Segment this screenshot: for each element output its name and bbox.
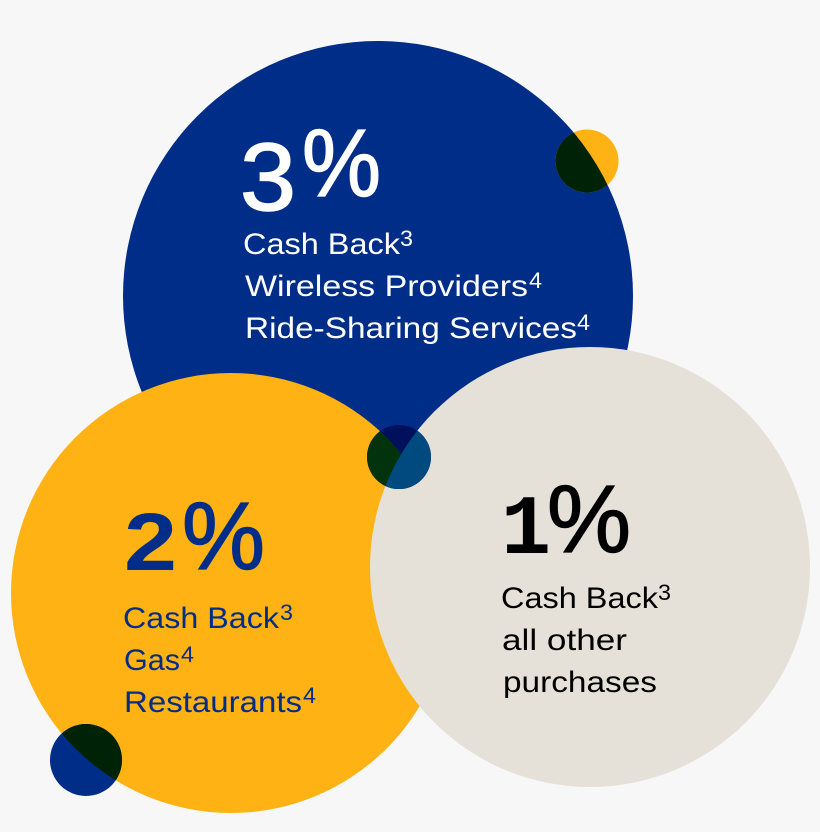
text: all other: all other — [502, 624, 627, 657]
icon: centre accent dot — [367, 425, 431, 489]
text: purchases: purchases — [503, 666, 657, 699]
heading: 3%: % — [302, 110, 381, 217]
text: Ride-Sharing Services: Ride-Sharing Services — [245, 312, 577, 345]
text block: 3% cash back — [240, 110, 590, 345]
text: Cash Back: Cash Back — [501, 582, 659, 615]
footnote mark: 3: 3 — [280, 600, 293, 625]
text block: 2% cash back — [123, 483, 316, 719]
footnote mark: 4: 4 — [303, 683, 316, 708]
text: Gas: Gas — [124, 644, 180, 677]
heading: 1%: % — [547, 466, 631, 573]
footnote mark: 4: 4 — [181, 642, 194, 667]
text: Cash Back: Cash Back — [243, 228, 401, 261]
icon: top right accent dot — [556, 130, 618, 192]
text block: 1% cash back — [501, 466, 671, 699]
text: Cash Back: Cash Back — [123, 602, 280, 635]
heading: 1% — [501, 466, 631, 579]
panel: 2% yellow circle — [11, 373, 451, 813]
footnote mark: 3: 3 — [658, 580, 671, 605]
panel: 1% beige circle — [370, 347, 810, 787]
heading: 2%: 2 — [124, 497, 177, 588]
heading: 2%: % — [182, 483, 265, 590]
footnote mark: 3: 3 — [400, 226, 413, 251]
heading: 2% — [124, 483, 265, 590]
panel: 3% blue circle — [123, 41, 633, 551]
heading: 1%: 1 — [501, 484, 551, 579]
text: Restaurants: Restaurants — [124, 686, 302, 719]
text: Wireless Providers: Wireless Providers — [245, 270, 528, 303]
icon: bottom left accent dot — [50, 724, 122, 796]
heading: 3%: 3 — [240, 124, 296, 231]
footnote mark: 4: 4 — [529, 268, 542, 293]
footnote mark: 4: 4 — [577, 310, 590, 335]
heading: 3% — [240, 110, 381, 231]
